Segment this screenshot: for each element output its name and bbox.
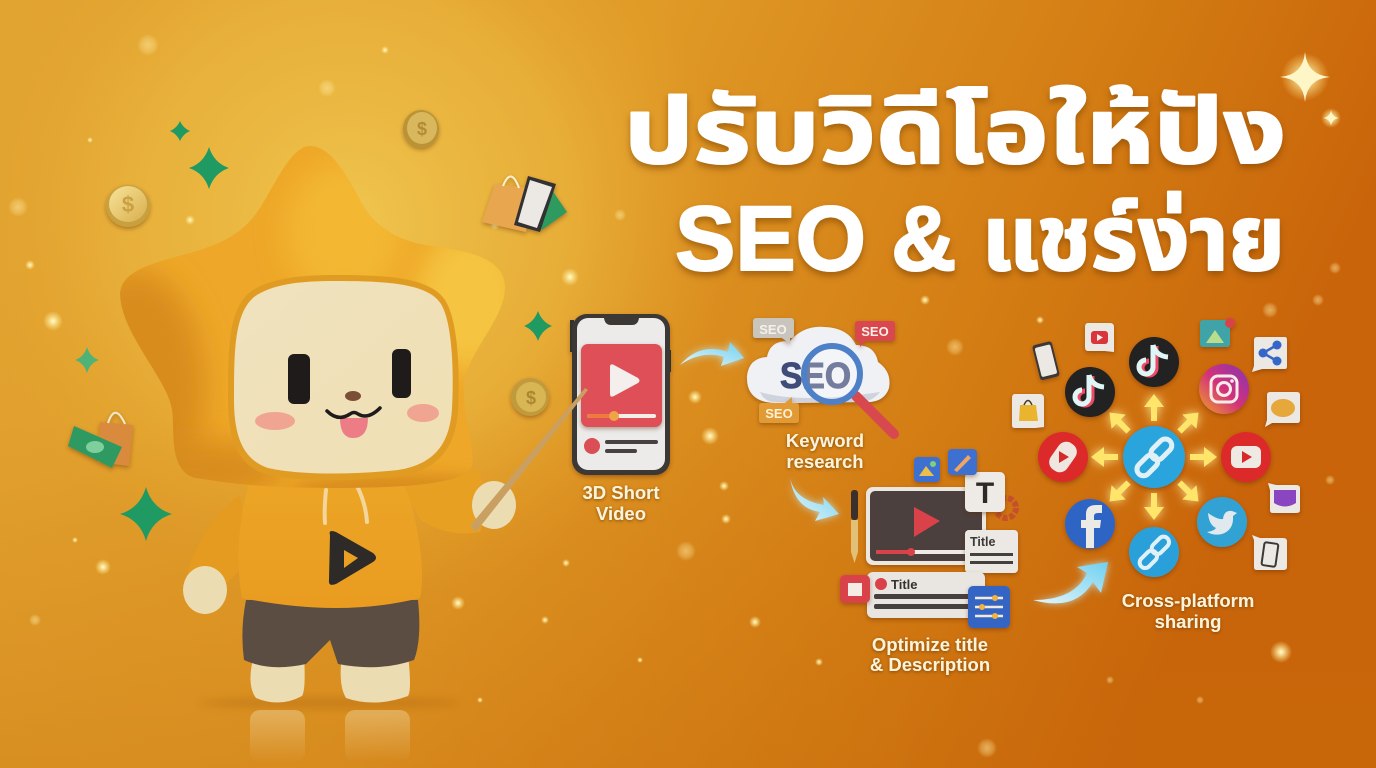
- mouth: [327, 408, 380, 417]
- icon: green sparkle left: [75, 347, 99, 373]
- step: cross-platform sharing: [1012, 318, 1300, 632]
- phone: [570, 314, 671, 475]
- star hood: [120, 146, 505, 488]
- title card right: [965, 530, 1018, 573]
- eyes: [288, 349, 411, 404]
- nose: [345, 391, 361, 401]
- YouTube bubble: [1085, 323, 1114, 352]
- icon: green sparkle right: [524, 311, 552, 341]
- tongue: [340, 418, 368, 438]
- video editor card: [866, 487, 986, 565]
- icon: coin right: [511, 378, 549, 416]
- mascot reflection: [200, 697, 460, 762]
- share bubble: [1252, 337, 1287, 372]
- center link icon: [1123, 426, 1185, 488]
- icon: green sparkle large top: [189, 147, 229, 189]
- Facebook icon: [1065, 499, 1115, 549]
- SEO bubble orange: [759, 397, 799, 423]
- Instagram icon: [1199, 364, 1249, 414]
- bag bubble: [1012, 394, 1044, 428]
- cloud: [747, 327, 890, 403]
- label: Cross-platform: [1122, 590, 1254, 611]
- SEO bubble orange: SEO: [765, 406, 793, 421]
- blue pencil icon: [948, 449, 977, 475]
- icon: green sparkle small top: [170, 121, 190, 141]
- icon: green sparkle bottom: [120, 487, 172, 541]
- label: sharing: [1155, 611, 1221, 632]
- shorts: [242, 600, 419, 667]
- video info lines: [584, 438, 658, 454]
- floating coins and shopping items: [68, 110, 567, 541]
- pen: [851, 490, 858, 563]
- YouTube Shorts icon: [1038, 432, 1088, 482]
- label: 3D Short: [582, 482, 660, 503]
- label: & Description: [870, 654, 990, 675]
- TikTok icon left: [1065, 367, 1115, 417]
- Twitter icon: [1197, 497, 1247, 547]
- phone bubble: [1252, 535, 1287, 570]
- phone tile: [1032, 341, 1060, 381]
- title: SEO & แชร์ง่าย: [675, 188, 1285, 290]
- face: [234, 281, 453, 474]
- SEO bubble grey: [753, 318, 794, 344]
- step: 3D short video phone: [570, 314, 671, 524]
- arrow: video to keyword research: [680, 342, 744, 366]
- gear icon: [996, 498, 1016, 518]
- legs: [250, 655, 410, 703]
- icon: shopping bag, phone and money top right: [482, 176, 567, 232]
- magnifier: [804, 346, 894, 434]
- hoodie body: [238, 480, 422, 608]
- image bubble: [1200, 318, 1235, 347]
- hoodie drawstrings: [325, 488, 367, 523]
- icon: coin right: $: [526, 388, 536, 408]
- YouTube icon: [1221, 432, 1271, 482]
- emoji bubble: [1265, 392, 1300, 427]
- title description panel: Title: [891, 577, 918, 592]
- pointer stick: [470, 388, 588, 532]
- hood opening rim: [228, 275, 459, 480]
- blue sliders icon: [968, 586, 1010, 628]
- left arm and hand: [183, 495, 250, 614]
- T icon: [965, 472, 1005, 512]
- cheeks: [255, 404, 439, 430]
- SEO bubble red: [855, 321, 895, 347]
- hoodie play logo: [329, 531, 376, 585]
- label: Video: [596, 503, 646, 524]
- side bubbles: [1012, 318, 1300, 570]
- link icon bottom: [1129, 527, 1179, 577]
- red media icon: [840, 575, 870, 603]
- TikTok icon top: [1129, 337, 1179, 387]
- radial yellow arrows: [1091, 394, 1217, 520]
- blue image icon: [914, 457, 940, 482]
- SEO bubble grey: SEO: [759, 322, 787, 337]
- video player card: [581, 344, 662, 427]
- label: Keyword: [786, 430, 864, 451]
- arrow: optimize to sharing: [1033, 562, 1108, 603]
- icon: money and bag left: [68, 413, 133, 468]
- arrow: keyword research to optimize: [790, 477, 839, 521]
- purple bubble: [1268, 483, 1300, 513]
- icon: coin top: $: [417, 119, 427, 139]
- step: keyword research: [747, 318, 895, 472]
- icon: coin top: [403, 110, 439, 148]
- title description panel: [867, 572, 985, 618]
- label: Optimize title: [872, 634, 988, 655]
- title: ปรับวิดีโอให้ปัง: [624, 81, 1286, 183]
- step: optimize title and description: [840, 449, 1018, 675]
- icon: coin left: [106, 185, 150, 227]
- label: research: [786, 451, 864, 472]
- mascot: star character: [120, 146, 516, 755]
- title card right: Title: [970, 535, 996, 549]
- right arm and hand: [400, 470, 516, 534]
- T icon: T: [976, 477, 994, 510]
- SEO text: SEO: [780, 355, 851, 396]
- title: [624, 81, 1286, 290]
- SEO bubble red: SEO: [861, 324, 889, 339]
- icon: coin left: $: [122, 192, 134, 217]
